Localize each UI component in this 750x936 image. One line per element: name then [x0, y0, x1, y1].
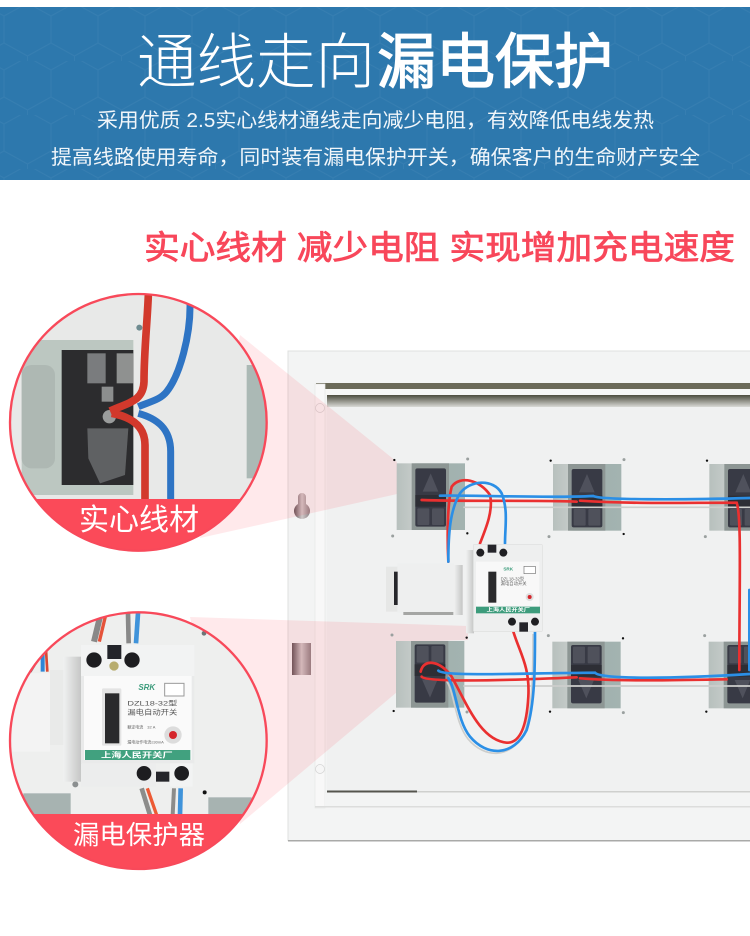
leakage breaker: 上海人民开关厂	[487, 607, 530, 614]
socket back	[62, 350, 133, 485]
rectangular slot	[292, 643, 311, 675]
right plate	[246, 365, 266, 478]
callout circle: leakage protector	[8, 611, 268, 870]
title: 通线走向	[137, 29, 375, 96]
socket row two	[390, 633, 750, 714]
pink zoom beam: bottom	[190, 617, 468, 824]
red heading: 实心线材 减少电阻 实现增加充电速度	[144, 229, 735, 266]
red and blue solid wires	[110, 295, 190, 502]
breaker close-up: DZL18-32型	[127, 698, 178, 707]
leakage breaker: DZL18-32型	[501, 575, 525, 581]
leakage breaker: SRK	[503, 567, 514, 572]
subtitle lines	[51, 109, 700, 169]
label: solid wire: 实心线材	[79, 504, 199, 537]
keyhole slot	[294, 493, 310, 519]
pink zoom beam: top	[200, 335, 397, 538]
leakage breaker	[466, 544, 542, 633]
sockets, breaker and wiring	[386, 457, 750, 753]
breaker close-up	[63, 645, 194, 787]
subtitle lines: 提高线路使用寿命，同时装有漏电保护开关，确保客户的生命财产安全	[51, 146, 700, 169]
breaker close-up: 额定电流 32 A	[127, 723, 156, 729]
junction box	[386, 563, 463, 615]
blue wires	[438, 483, 750, 751]
blue header banner	[0, 7, 750, 180]
red wires	[421, 480, 740, 743]
lower plates	[23, 793, 71, 817]
label ribbon	[37, 499, 240, 550]
subtitle lines: 采用优质 2.5实心线材通线走向减少电阻，有效降低电线发热	[97, 109, 654, 132]
breaker close-up: 漏电自动开关	[127, 707, 178, 716]
title	[137, 29, 613, 96]
label ribbon	[34, 814, 242, 868]
breaker close-up: SRK	[138, 683, 156, 692]
wires above and below	[94, 613, 181, 815]
breaker close-up: 上海人民开关厂	[101, 750, 173, 760]
side box and wires	[31, 652, 49, 672]
wire shadows	[446, 507, 750, 753]
label: leakage protector: 漏电保护器	[73, 820, 205, 850]
mounting plate	[22, 340, 133, 495]
title: 漏电保护	[377, 29, 613, 96]
distribution panel photo	[190, 335, 750, 842]
leakage breaker: 漏电自动开关	[501, 580, 527, 587]
callout circle: solid wire	[8, 292, 268, 552]
socket row one	[391, 457, 750, 538]
panel body	[288, 351, 750, 841]
breaker close-up: 漏电动作电流≤30mA	[127, 738, 164, 744]
